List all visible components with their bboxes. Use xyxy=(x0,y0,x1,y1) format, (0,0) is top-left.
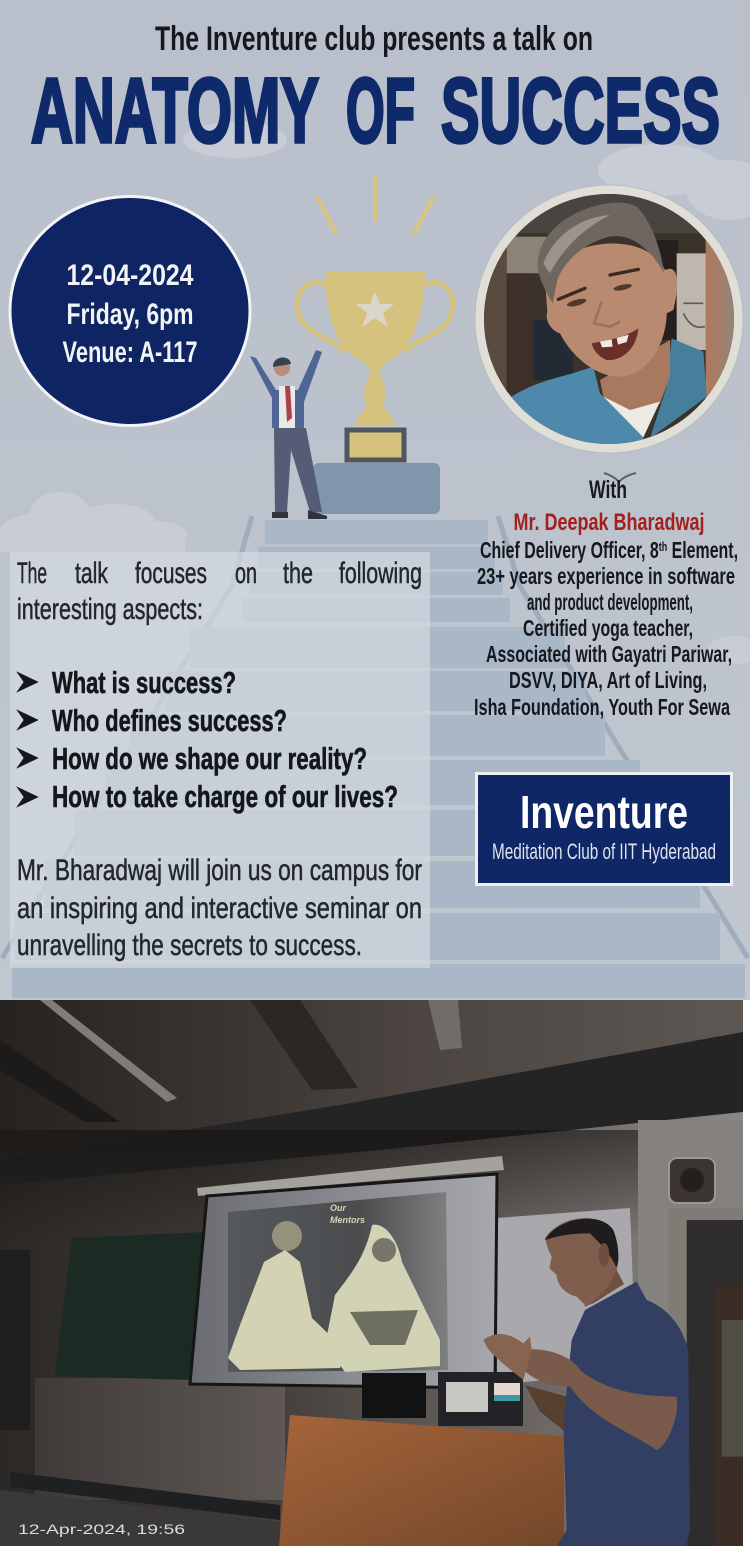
club logo box: Inventure xyxy=(520,786,688,838)
screen housing xyxy=(197,1156,504,1196)
floor xyxy=(0,1490,280,1546)
heading: presents line: The Inventure club presents a talk on xyxy=(155,20,593,58)
ceiling xyxy=(140,1000,743,1130)
timestamp: 12-Apr-2024, 19:56 xyxy=(18,1521,185,1537)
bio lines: th xyxy=(659,539,667,554)
speaker bio xyxy=(474,473,738,720)
text block: intro: talk xyxy=(75,557,109,590)
air duct xyxy=(187,1032,743,1130)
text block: intro: interesting aspects: xyxy=(17,593,203,626)
bullet list: How do we shape our reality? xyxy=(52,741,367,776)
slide caption: Our xyxy=(330,1203,346,1213)
club logo box xyxy=(476,774,732,884)
staircase xyxy=(12,520,745,998)
panel: event poster xyxy=(0,0,750,1000)
wall clock xyxy=(669,1158,715,1203)
shirt xyxy=(512,368,644,444)
text block: closing: unravelling the secrets to success. xyxy=(17,929,362,962)
mentor woman xyxy=(325,1225,440,1372)
text block: intro: the xyxy=(283,557,313,590)
projection screen xyxy=(190,1174,497,1388)
title xyxy=(31,60,720,162)
speaker in polo xyxy=(483,1218,690,1546)
trophy pedestal xyxy=(313,463,440,514)
right wall panel xyxy=(638,1120,666,1304)
bird mark xyxy=(604,473,636,482)
bio lines: Chief Delivery Officer, 8 xyxy=(480,537,738,563)
lower wall xyxy=(35,1378,285,1500)
door right xyxy=(668,1208,743,1546)
text block: closing: Mr. Bharadwaj will join us on campus for xyxy=(17,854,422,887)
mentor man xyxy=(228,1221,345,1370)
polo shirt xyxy=(557,1282,690,1546)
date badge: Venue: A-117 xyxy=(62,336,198,369)
back forearm xyxy=(525,1385,567,1432)
bullet list: How to take charge of our lives? xyxy=(52,779,398,814)
mouth xyxy=(592,328,638,360)
date badge: Friday, 6pm xyxy=(66,298,194,331)
speaker portrait xyxy=(470,180,750,460)
text block: intro: on xyxy=(235,557,257,590)
date badge xyxy=(10,196,250,426)
text block: intro: focuses xyxy=(135,557,207,590)
date badge: 12-04-2024 xyxy=(66,259,194,292)
hair xyxy=(538,203,664,303)
slide photo xyxy=(228,1192,448,1372)
whiteboard xyxy=(497,1208,636,1385)
bullet list: Who defines success? xyxy=(52,703,287,738)
photo: seminar in classroom xyxy=(0,1000,743,1546)
clouds xyxy=(0,122,750,664)
text block: closing xyxy=(17,854,422,962)
upper wall xyxy=(84,1112,743,1534)
icon: trophy xyxy=(297,178,453,460)
head xyxy=(545,1218,618,1307)
lectern xyxy=(279,1415,564,1546)
text block: intro: The xyxy=(17,557,47,590)
bullet list xyxy=(17,665,398,814)
photo: seminar in classroom: Mentors xyxy=(330,1215,365,1225)
text panel backing xyxy=(10,552,430,968)
title: ANATOMY xyxy=(31,60,319,162)
laptops xyxy=(362,1373,426,1418)
bio lines xyxy=(474,537,738,720)
text block: intro xyxy=(17,557,422,626)
text block: intro: following xyxy=(339,557,422,590)
stair rails xyxy=(2,516,748,958)
brows and eyes xyxy=(558,269,638,299)
bullet list: What is success? xyxy=(52,665,236,700)
text block: closing: an inspiring and interactive seminar on xyxy=(17,892,422,925)
undershirt xyxy=(603,397,660,437)
arm and hands xyxy=(518,1349,677,1450)
face xyxy=(545,243,677,377)
with label: With xyxy=(589,476,627,504)
icon: person celebrating xyxy=(250,350,327,519)
left door xyxy=(0,1250,30,1430)
title: OF xyxy=(346,60,415,162)
neck xyxy=(600,340,670,412)
blackboard xyxy=(55,1232,205,1380)
neck xyxy=(583,1270,624,1307)
